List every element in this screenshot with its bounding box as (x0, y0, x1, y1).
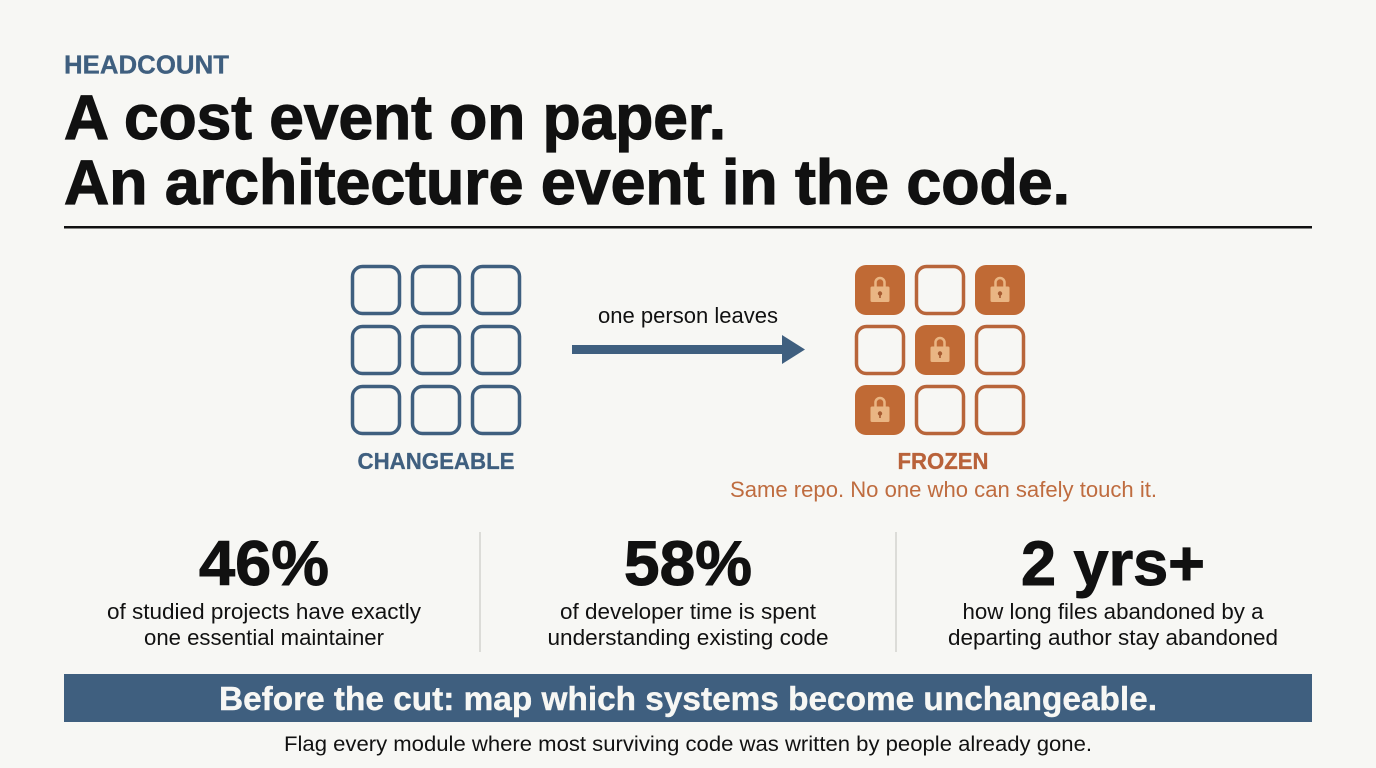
locked cell (855, 385, 905, 435)
banner: Before the cut: map which systems become unchangeable. (219, 680, 1157, 717)
locked cell (975, 265, 1025, 315)
arrow (572, 335, 805, 364)
stat: 46%: 46% (199, 529, 329, 599)
stat: 2 yrs+: how long files abandoned by a (962, 599, 1264, 624)
footer note: Flag every module where most surviving code was written by people already gone. (284, 733, 1092, 756)
eyebrow: HEADCOUNT: HEADCOUNT (64, 52, 229, 80)
panel: changeable grid (352, 266, 520, 434)
frozen caption: Same repo. No one who can safely touch it. (730, 477, 1157, 502)
stat: 58%: of developer time is spent (560, 599, 816, 624)
title: An architecture event in the code. (64, 148, 1070, 218)
stat: 58% (548, 529, 828, 650)
stat: 46%: of studied projects have exactly (107, 599, 421, 624)
locked cell (915, 325, 965, 375)
stat: 46% (107, 529, 421, 650)
locked cell (855, 265, 905, 315)
stat: 2 yrs+: departing author stay abandoned (948, 625, 1278, 650)
label: CHANGEABLE: CHANGEABLE (358, 448, 514, 474)
banner (64, 674, 1312, 722)
stat: 46%: one essential maintainer (144, 625, 384, 650)
arrow label: one person leaves: one person leaves (598, 303, 778, 328)
stat: 2 yrs+ (948, 529, 1278, 650)
label: FROZEN: FROZEN (898, 448, 988, 474)
stat: 58%: understanding existing code (548, 625, 828, 650)
title: A cost event on paper. (64, 83, 726, 153)
stat: 2 yrs+: 2 yrs+ (1021, 529, 1205, 599)
panel: frozen grid (855, 265, 1025, 435)
stat: 58%: 58% (624, 529, 752, 599)
title (64, 83, 1070, 218)
